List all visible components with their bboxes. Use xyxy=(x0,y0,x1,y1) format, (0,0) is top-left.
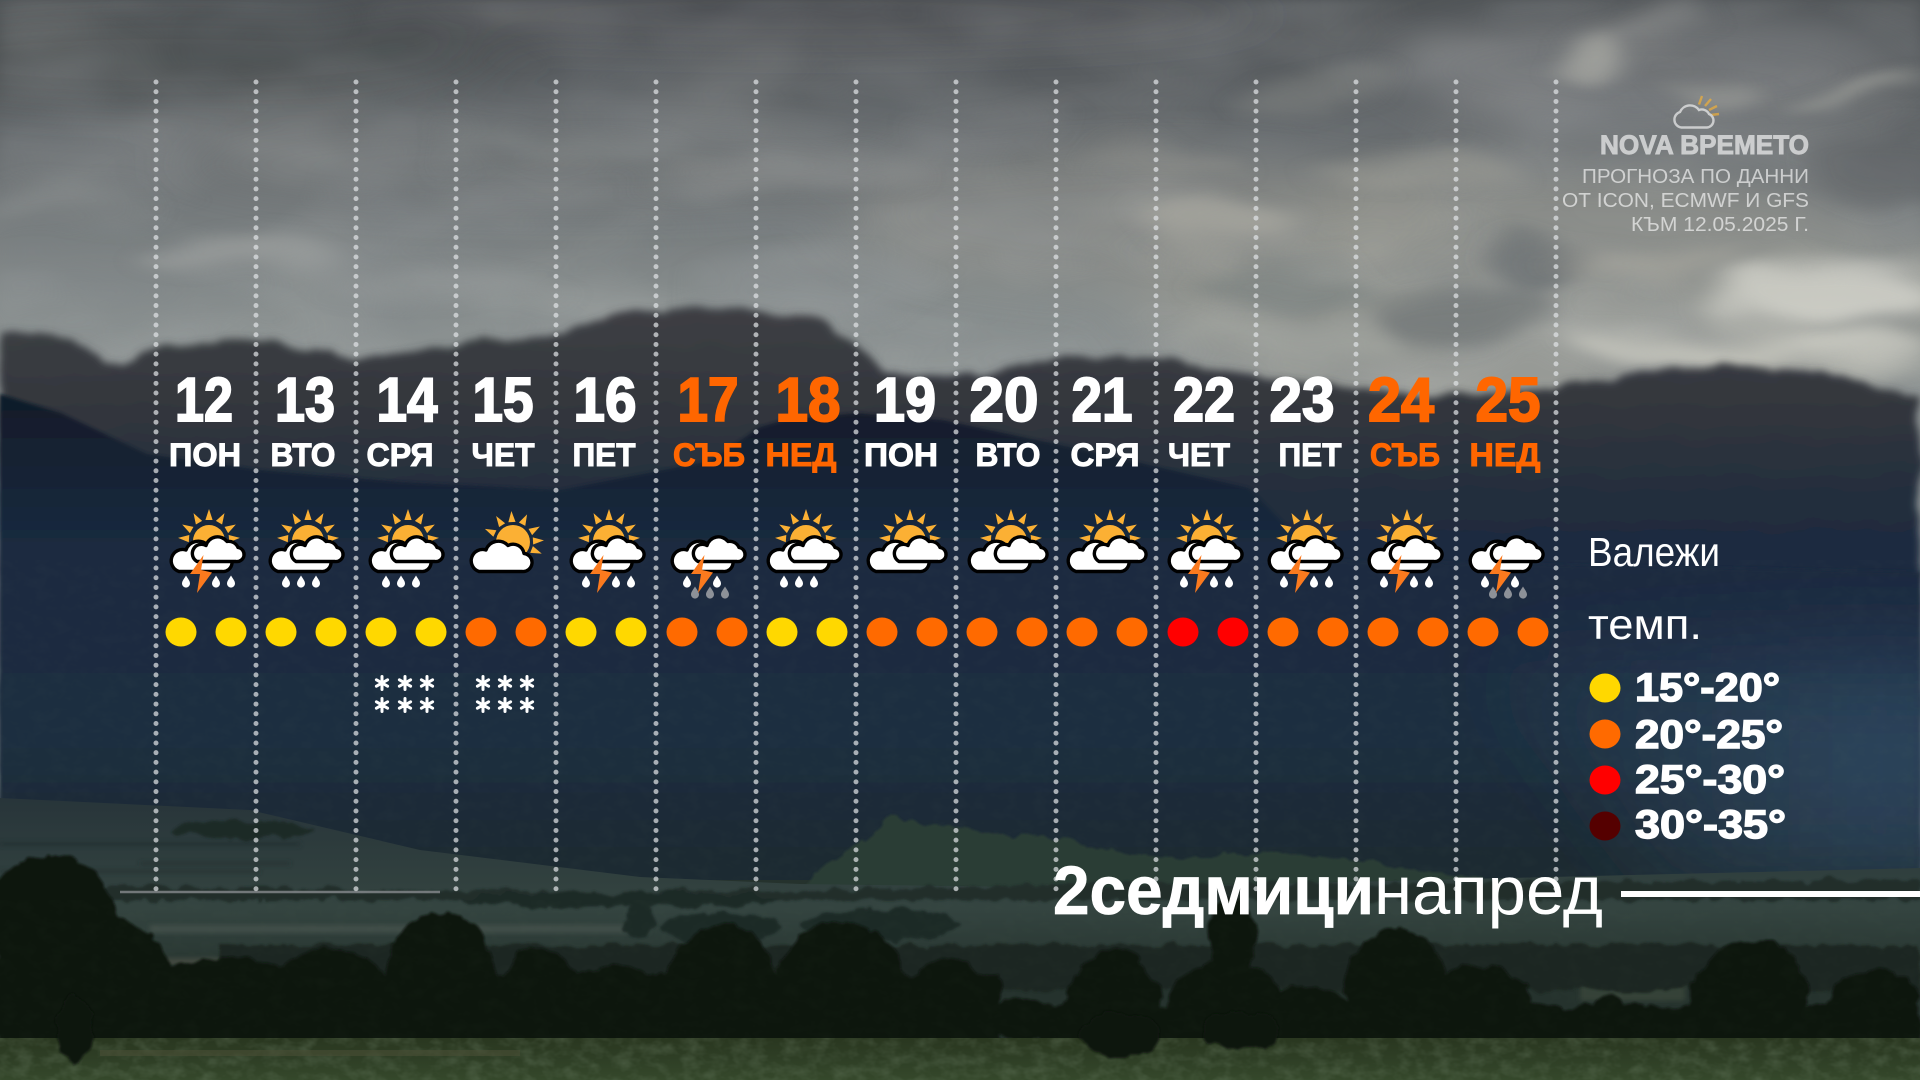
day 13 ВТО: ВТО xyxy=(270,437,336,473)
day 14 СРЯ: СРЯ xyxy=(366,437,434,473)
day 19 ПОН xyxy=(864,366,948,646)
title: 2 weeks ahead xyxy=(1053,852,1603,929)
source note: КЪМ 12.05.2025 Г. xyxy=(1631,214,1809,236)
day 14 СРЯ: 14 xyxy=(376,366,438,435)
day 19 ПОН: ПОН xyxy=(864,437,938,473)
day 20 ВТО xyxy=(966,366,1048,646)
title: 2 weeks ahead: напред xyxy=(1374,852,1603,929)
day 25 НЕД: НЕД xyxy=(1470,437,1541,473)
day 15 ЧЕТ: 15 xyxy=(472,366,534,435)
day 24 СЪБ: 24 xyxy=(1368,366,1434,435)
day 21 СРЯ xyxy=(1066,366,1148,646)
day 21 СРЯ: СРЯ xyxy=(1070,437,1140,473)
logo wordmark: NOVA ВРЕМЕТО xyxy=(1600,130,1809,160)
day 22 ЧЕТ xyxy=(1168,366,1248,646)
legend row label: precipitation: Валежи xyxy=(1588,529,1720,575)
day 15 ЧЕТ: ЧЕТ xyxy=(472,437,535,473)
day 18 НЕД: НЕД xyxy=(766,437,837,473)
source note xyxy=(1562,166,1809,236)
day 17 СЪБ: 17 xyxy=(678,366,738,435)
day 25 НЕД xyxy=(1468,366,1548,646)
temperature legend: 25°-30° xyxy=(1635,758,1785,802)
day 16 ПЕТ xyxy=(566,366,646,646)
day 18 НЕД xyxy=(766,366,848,646)
day 14 СРЯ xyxy=(366,366,446,712)
source note: ОТ ICON, ECMWF И GFS xyxy=(1562,190,1809,212)
temperature legend xyxy=(1590,666,1786,847)
day 15 ЧЕТ xyxy=(466,366,546,712)
title rule line xyxy=(1621,891,1920,897)
day 22 ЧЕТ: ЧЕТ xyxy=(1168,437,1230,473)
temperature legend: 20°-25° xyxy=(1635,713,1783,757)
day 23 ПЕТ: 23 xyxy=(1270,366,1334,435)
day 22 ЧЕТ: 22 xyxy=(1173,366,1235,435)
day 23 ПЕТ: ПЕТ xyxy=(1278,437,1342,473)
logo and forecast source note xyxy=(1562,96,1809,236)
day 20 ВТО: 20 xyxy=(970,366,1038,435)
day 12 ПОН: ПОН xyxy=(169,437,241,473)
day 21 СРЯ: 21 xyxy=(1072,366,1132,435)
title: 2 weeks ahead: 2седмици xyxy=(1053,852,1374,929)
day 16 ПЕТ: 16 xyxy=(574,366,636,435)
day 13 ВТО: 13 xyxy=(275,366,335,435)
temperature legend: 15°-20° xyxy=(1635,666,1780,710)
day 25 НЕД: 25 xyxy=(1476,366,1540,435)
day 17 СЪБ: СЪБ xyxy=(673,437,745,473)
legend row label: temperature: темп. xyxy=(1588,601,1702,649)
day 23 ПЕТ xyxy=(1268,366,1348,646)
day 18 НЕД: 18 xyxy=(776,366,840,435)
day 17 СЪБ xyxy=(666,366,748,646)
day 24 СЪБ: СЪБ xyxy=(1370,437,1440,473)
day 19 ПОН: 19 xyxy=(874,366,936,435)
day 12 ПОН xyxy=(166,366,246,646)
day 24 СЪБ xyxy=(1368,366,1448,646)
day 16 ПЕТ: ПЕТ xyxy=(572,437,636,473)
icon: logo cloud and sun xyxy=(1674,96,1719,128)
day 13 ВТО xyxy=(266,366,346,646)
temperature legend: 30°-35° xyxy=(1635,803,1786,847)
day 12 ПОН: 12 xyxy=(175,366,233,435)
source note: ПРОГНОЗА ПО ДАННИ xyxy=(1582,166,1809,188)
day 20 ВТО: ВТО xyxy=(976,437,1040,473)
